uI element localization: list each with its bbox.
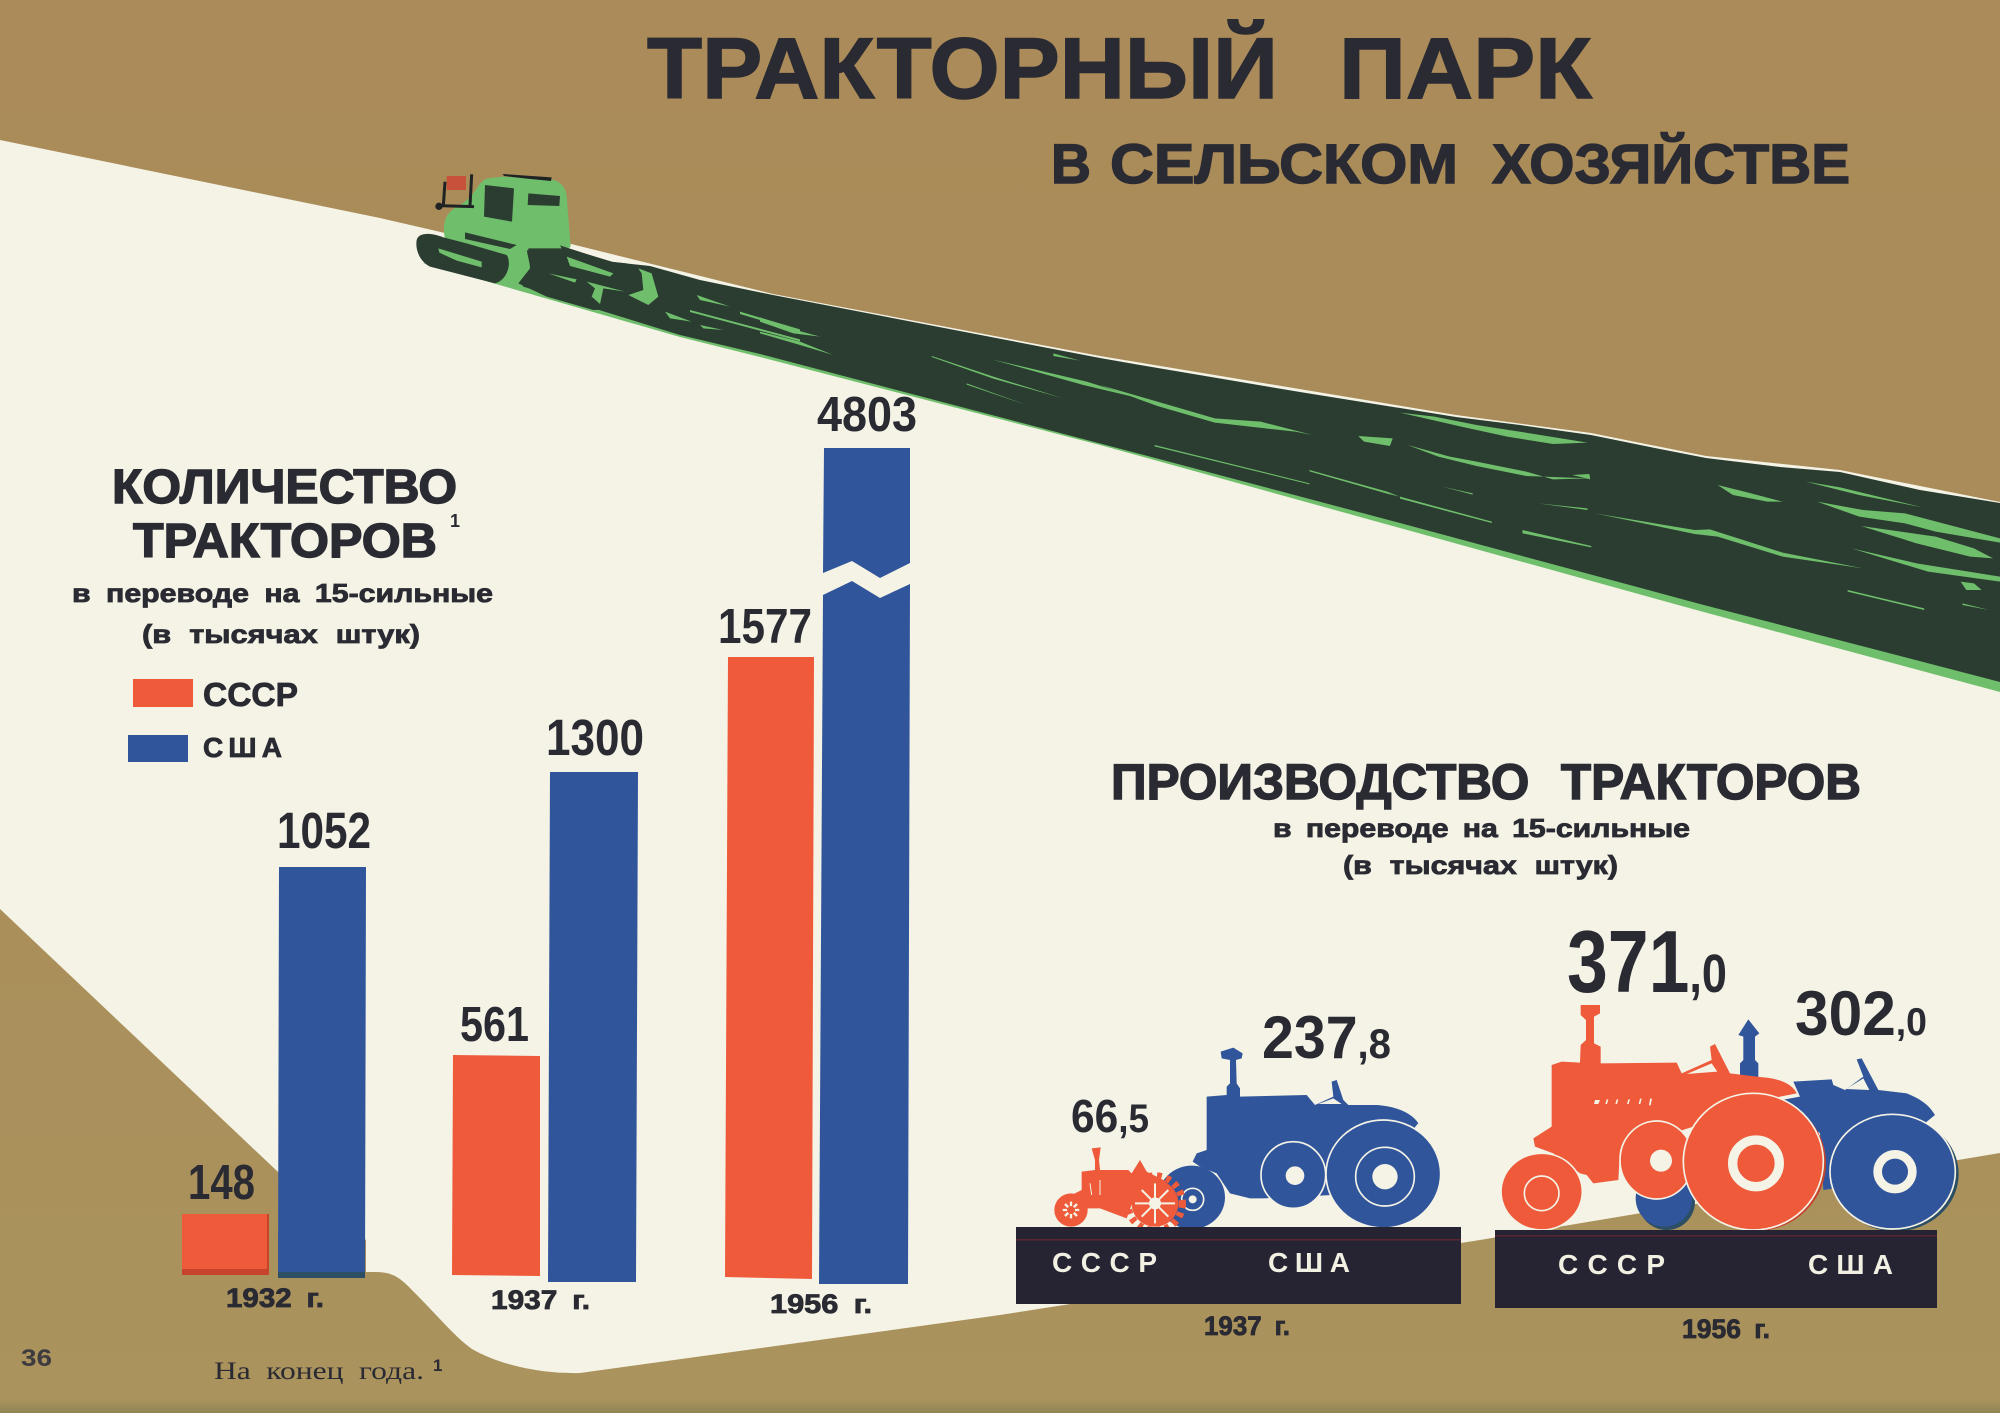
heading: number of tractors: КОЛИЧЕСТВО [112, 461, 457, 514]
subtitle: СЕЛЬСКОМ [1110, 132, 1458, 195]
bars 1956: 4803 [817, 388, 917, 442]
field: light furrow streaks, middle section [1100, 385, 1400, 497]
field start clods [518, 245, 680, 310]
subtitle: В [1051, 132, 1091, 195]
subtitle: ХОЗЯЙСТВЕ [1492, 132, 1850, 195]
group: 1937 production [1016, 1004, 1461, 1341]
value: USSR 1956: 371,0 [1567, 912, 1727, 1011]
heading: number of tractors: 1 [450, 511, 460, 531]
tractor roof line [503, 174, 552, 181]
icon: USA tractor 1937 [1158, 1048, 1441, 1229]
subheading: production units [1273, 813, 1690, 880]
legend: США [203, 732, 282, 763]
title [647, 20, 1593, 117]
base plate 1956: СССР [1558, 1249, 1665, 1280]
bar chart: tractor counts [182, 388, 917, 1319]
page number: 36 [21, 1345, 52, 1372]
heading: number of tractors [112, 461, 460, 568]
icon: USSR tractor 1956 [1501, 1005, 1826, 1231]
year label 1937: 1937 г. [1204, 1311, 1290, 1341]
tractor body [430, 177, 571, 290]
group: 1956 production [1495, 912, 1959, 1344]
legend: СССР [203, 676, 298, 713]
subtitle [1051, 132, 1850, 195]
heading: number of tractors: ТРАКТОРОВ [133, 515, 437, 568]
heading: tractor production: ПРОИЗВОДСТВО ТРАКТОРОВ [1111, 754, 1861, 810]
legend [128, 676, 298, 763]
base plate 1937: США [1268, 1247, 1350, 1278]
icon: USSR tractor 1937 [1054, 1147, 1182, 1231]
tractor windows [484, 185, 560, 222]
field: light furrow streaks, left section [760, 317, 1140, 405]
value: USA 1937: 237,8 [1262, 1004, 1391, 1071]
title: ПАРК [1339, 21, 1593, 117]
base plate 1937: СССР [1052, 1247, 1157, 1278]
year label 1956: 1956 г. [1682, 1314, 1770, 1344]
bars 1937: 1300 [546, 709, 644, 766]
icon: USA tractor 1956 [1636, 1019, 1959, 1231]
field: light green underlay [423, 250, 2000, 692]
subheading: units [72, 578, 493, 649]
bars 1932: 148 [188, 1156, 255, 1210]
bars 1956 [718, 388, 917, 1319]
illustration: plowed field with tractor [416, 174, 2000, 692]
bars 1937: 561 [460, 998, 529, 1052]
bars 1937: 1937 г. [491, 1285, 590, 1315]
bars 1932 [182, 802, 371, 1313]
footnote: 1 [433, 1356, 442, 1375]
subheading: production units: в переводе на 15-сильные [1273, 813, 1690, 843]
field: light furrow streaks, right section [1400, 413, 2000, 610]
bars 1932: 1052 [277, 802, 371, 859]
subheading: production units: (в тысячах штук) [1343, 850, 1618, 880]
title: ТРАКТОРНЫЙ [647, 20, 1278, 117]
base plate 1937 [1016, 1227, 1461, 1304]
panel: tractor production [1016, 754, 1959, 1344]
base plate 1956 [1495, 1230, 1937, 1308]
tractor: green crawler at top of slope [416, 174, 800, 341]
bars 1956: 1956 г. [770, 1289, 872, 1319]
bars 1932: 1932 г. [226, 1283, 324, 1313]
footnote: На конец года. [214, 1358, 424, 1385]
tractor crawler track [416, 234, 509, 283]
tractor flag [435, 174, 474, 210]
base plate 1956: США [1808, 1249, 1893, 1280]
bars 1956: 1577 [718, 600, 812, 654]
subheading: units: в переводе на 15-сильные [72, 578, 493, 608]
value: USSR 1937: 66,5 [1071, 1090, 1149, 1142]
field: dark plowed soil [518, 246, 2000, 682]
panel: number of tractors heading and legend [72, 461, 493, 763]
bars 1937 [452, 709, 644, 1315]
value: USA 1956: 302,0 [1795, 979, 1927, 1049]
footnote [214, 1356, 442, 1385]
subheading: units: (в тысячах штук) [142, 619, 420, 649]
